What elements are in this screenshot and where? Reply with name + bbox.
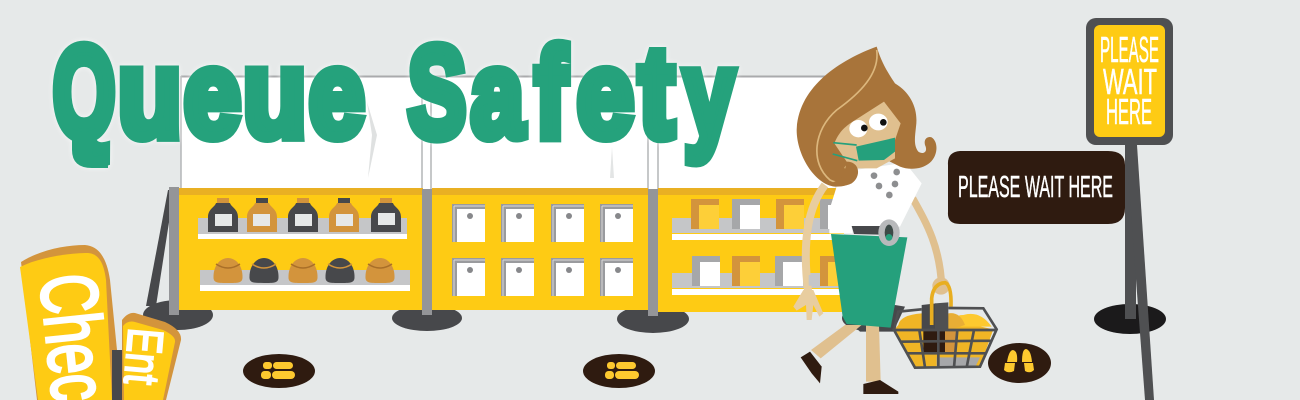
left brace strut xyxy=(146,190,174,306)
floor marker: right xyxy=(988,343,1051,383)
post sign: please wait here: HERE xyxy=(1106,91,1152,132)
title: S xyxy=(408,20,466,165)
title: y xyxy=(684,25,734,163)
panel: boxes xyxy=(658,188,848,312)
back leg and shoe xyxy=(801,325,862,383)
shopping basket xyxy=(894,283,997,368)
title: u xyxy=(243,26,307,163)
title: f xyxy=(535,21,567,164)
back panels xyxy=(181,76,835,189)
title: e xyxy=(309,26,365,163)
title: u xyxy=(118,26,182,163)
slip under skirt xyxy=(843,305,905,332)
post sign stand xyxy=(1094,145,1166,400)
title xyxy=(53,20,734,168)
left arm xyxy=(793,185,825,320)
top xyxy=(829,163,922,233)
basket frame xyxy=(894,308,997,368)
sign pole xyxy=(112,350,124,400)
skirt xyxy=(831,234,907,328)
bottles xyxy=(208,198,401,232)
buns xyxy=(213,258,395,283)
face mask xyxy=(833,138,895,161)
sign: please wait here: PLEASE WAIT HERE xyxy=(958,169,1113,204)
title: e xyxy=(577,25,634,163)
hair curl xyxy=(830,162,858,186)
right arm xyxy=(913,198,950,295)
title: a xyxy=(471,27,525,163)
floor marker: left xyxy=(243,354,315,388)
floor sign: entry xyxy=(113,313,181,400)
buckle xyxy=(878,219,900,246)
title: Q xyxy=(53,20,115,164)
title: e xyxy=(184,25,241,163)
hair xyxy=(797,47,936,187)
sign: please wait here xyxy=(948,151,1125,224)
panel: bottles and buns xyxy=(179,188,423,310)
floor sign: entry: Ent xyxy=(113,326,173,387)
face xyxy=(834,102,901,168)
woman with mask xyxy=(793,47,950,394)
panel: cards xyxy=(432,188,648,310)
post sign: please wait here xyxy=(1086,18,1173,145)
belt xyxy=(852,226,897,235)
stand bases xyxy=(143,300,894,333)
title: t xyxy=(639,21,674,164)
front leg and shoe xyxy=(863,325,898,394)
post sign: please wait here: PLEASE xyxy=(1100,29,1159,70)
post sign: please wait here: WAIT xyxy=(1103,61,1157,102)
stand posts xyxy=(169,187,658,316)
floor marker: middle xyxy=(583,354,655,388)
basket handle xyxy=(932,283,951,325)
basket contents xyxy=(894,302,993,368)
